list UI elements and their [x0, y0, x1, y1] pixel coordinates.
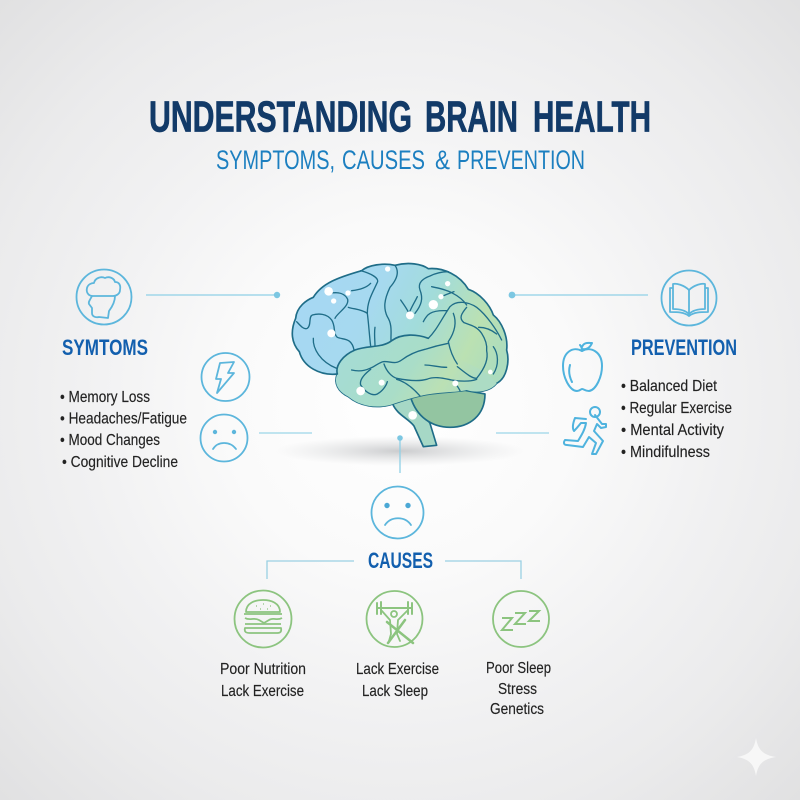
- prevention list: • Balanced Diet: [621, 378, 717, 395]
- temporal lobe: [336, 335, 497, 407]
- title: HEALTH: [533, 92, 651, 142]
- title: BRAIN: [425, 92, 518, 142]
- symptoms list: • Mood Changes: [60, 432, 160, 449]
- brain shadow: [275, 436, 525, 466]
- text: lack exercise: Lack Sleep: [362, 683, 428, 700]
- brain folds: [297, 265, 502, 396]
- subtitle: [216, 145, 585, 175]
- cerebellum: [411, 388, 485, 427]
- neuron highlights: [324, 266, 493, 420]
- text: poor nutrition: Lack Exercise: [221, 683, 304, 700]
- prevention list: • Mindifulness: [621, 444, 710, 461]
- connector: prevention to brain: [509, 292, 648, 298]
- icon: sleep zzz: [493, 591, 549, 647]
- heading: prevention: PREVENTION: [631, 335, 737, 360]
- icon: running person: [564, 407, 606, 454]
- text: poor sleep: Genetics: [490, 701, 544, 718]
- bracket connector: [267, 561, 521, 579]
- connector: brain to causes: [397, 435, 403, 473]
- title: UNDERSTANDING: [149, 92, 412, 142]
- symptoms list: • Headaches/Fatigue: [60, 410, 187, 428]
- heading: symtoms: SYMTOMS: [62, 335, 148, 360]
- symptoms list: [60, 389, 187, 471]
- icon: open book: [662, 270, 716, 326]
- subtitle: &: [435, 145, 450, 175]
- icon: sad face left: [200, 414, 248, 462]
- text: poor sleep: Poor Sleep: [486, 660, 551, 677]
- icon: apple: [563, 343, 602, 391]
- text: lack exercise: Lack Exercise: [356, 661, 439, 678]
- text: lack exercise: [356, 661, 439, 700]
- icon: burger: [234, 590, 292, 648]
- subtitle: CAUSES: [342, 145, 425, 175]
- connector: symptoms to brain: [146, 292, 280, 298]
- brain stem: [393, 397, 437, 447]
- icon: sad face centre: [372, 486, 424, 538]
- icon: lightning bolt: [202, 353, 250, 401]
- symptoms list: • Memory Loss: [60, 389, 150, 406]
- cerebrum: [292, 264, 508, 407]
- prevention list: [621, 378, 732, 461]
- subtitle: SYMPTOMS,: [216, 145, 335, 175]
- sparkle watermark: [737, 738, 776, 776]
- prevention list: • Regular Exercise: [621, 400, 732, 417]
- text: poor sleep: Stress: [498, 681, 537, 698]
- icon: head with cloud: [76, 270, 132, 324]
- brain illustration: [292, 264, 508, 447]
- prevention section: [563, 270, 737, 461]
- subtitle: PREVENTION: [457, 145, 585, 175]
- heading: causes: CAUSES: [368, 548, 433, 573]
- text: poor sleep: [486, 660, 551, 718]
- causes section: [220, 486, 551, 718]
- symptoms list: • Cognitive Decline: [62, 454, 178, 471]
- symptoms section: [60, 270, 250, 471]
- connector: sad face to brain: [259, 432, 312, 434]
- text: poor nutrition: [220, 661, 306, 700]
- text: poor nutrition: Poor Nutrition: [220, 661, 306, 678]
- prevention list: • Mental Activity: [621, 422, 724, 439]
- connector: brain to running icon: [496, 432, 549, 434]
- icon: crossed-out weightlifter: [366, 591, 422, 647]
